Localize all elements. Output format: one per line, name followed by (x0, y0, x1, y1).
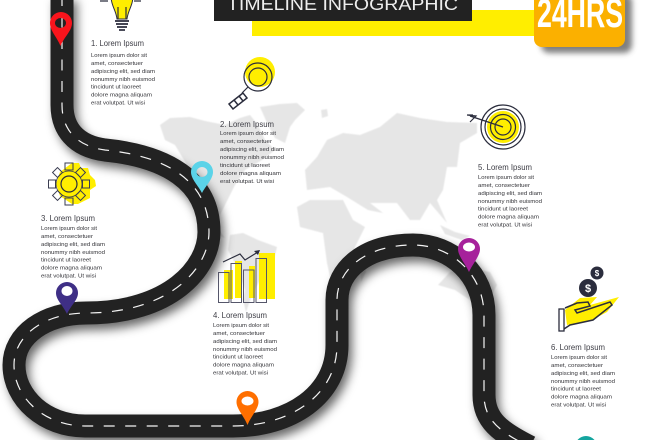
pin: magenta (458, 238, 480, 272)
step 6 text (551, 342, 615, 408)
step 3 text: dolore magna aliquam (41, 266, 102, 272)
step 2 text (220, 119, 284, 185)
step 6 text: tincidunt ut laoreet (551, 386, 601, 392)
icon: hand with coins: $ (595, 269, 600, 278)
step 1 text: erat volutpat. Ut wisi (91, 100, 145, 106)
step 1 text (91, 38, 155, 106)
step 5 text: Lorem ipsum dolor sit (478, 175, 534, 181)
step 1 text: 1. Lorem Ipsum (91, 38, 144, 48)
icon: gear (48, 163, 96, 205)
step 2 text: tincidunt ut laoreet (220, 163, 270, 169)
step 5 text: nonummy nibh euismod (478, 199, 542, 205)
step 4 text: erat volutpat. Ut wisi (213, 370, 268, 376)
step 2 text: 2. Lorem Ipsum (220, 119, 274, 129)
step 5 text (478, 162, 542, 228)
world map (160, 103, 497, 312)
pin: orange (236, 391, 258, 425)
icon: target (467, 105, 525, 149)
icon: magnifier (229, 57, 275, 109)
step 3 text: Lorem ipsum dolor sit (41, 226, 97, 232)
step 2 text: erat volutpat. Ut wisi (220, 179, 274, 185)
step 6 text: erat volutpat. Ut wisi (551, 402, 606, 408)
step 6 text: Lorem ipsum dolor sit (551, 355, 607, 361)
step 6 text: adipiscing elit, sed diam (551, 371, 615, 377)
icon: hand with coins: $ (585, 283, 591, 295)
step 6 text: amet, consectetuer (551, 363, 603, 369)
step 4 text: adipiscing elit, sed diam (213, 339, 277, 345)
step 4 text: dolore magna aliquam (213, 362, 274, 368)
title highlight bar (252, 10, 534, 36)
step 3 text: amet, consectetuer (41, 234, 93, 240)
pin: teal (575, 436, 597, 440)
step 4 text: Lorem ipsum dolor sit (213, 323, 269, 329)
step 6 text: nonummy nibh euismod (551, 379, 615, 385)
step 4 text (213, 310, 277, 376)
step 1 text: nonummy nibh euismod (91, 77, 155, 83)
step 5 text: 5. Lorem Ipsum (478, 162, 532, 172)
pin: purple (56, 282, 78, 314)
step 5 text: amet, consectetuer (478, 183, 530, 189)
step 2 text: dolore magna aliquam (220, 171, 281, 177)
title banner (214, 0, 472, 21)
pin: cyan (191, 161, 213, 193)
step 1 text: dolore magna aliquam (91, 92, 152, 98)
road (14, 0, 534, 440)
icon: hand with coins (559, 266, 619, 331)
step 2 text: adipiscing elit, sed diam (220, 147, 284, 153)
step 5 text: adipiscing elit, sed diam (478, 191, 542, 197)
step 1 text: adipiscing elit, sed diam (91, 69, 155, 75)
pin: red (50, 12, 72, 46)
badge: 24 hours (534, 0, 632, 53)
step 4 text: amet, consectetuer (213, 331, 265, 337)
step 5 text: tincidunt ut laoreet (478, 206, 528, 212)
step 2 text: nonummy nibh euismod (220, 155, 284, 161)
step 3 text: nonummy nibh euismod (41, 250, 105, 256)
step 4 text: tincidunt ut laoreet (213, 354, 263, 360)
step 6 text: dolore magna aliquam (551, 394, 612, 400)
step 1 text: tincidunt ut laoreet (91, 84, 141, 90)
step 3 text: erat volutpat. Ut wisi (41, 274, 96, 280)
icon: light bulb (100, 0, 141, 30)
step 2 text: amet, consectetuer (220, 139, 272, 145)
step 4 text: 4. Lorem Ipsum (213, 310, 267, 320)
step 2 text: Lorem ipsum dolor sit (220, 131, 276, 137)
step 1 text: Lorem ipsum dolor sit (91, 53, 147, 59)
step 1 text: amet, consectetuer (91, 61, 143, 67)
step 5 text: dolore magna aliquam (478, 214, 539, 220)
step 3 text: 3. Lorem Ipsum (41, 213, 95, 223)
step 3 text (41, 213, 105, 280)
step 5 text: erat volutpat. Ut wisi (478, 222, 532, 228)
step 6 text: 6. Lorem Ipsum (551, 342, 605, 352)
step 3 text: tincidunt ut laoreet (41, 258, 91, 264)
step 4 text: nonummy nibh euismod (213, 347, 277, 353)
icon: bar chart (218, 250, 275, 302)
step 3 text: adipiscing elit, sed diam (41, 242, 105, 248)
